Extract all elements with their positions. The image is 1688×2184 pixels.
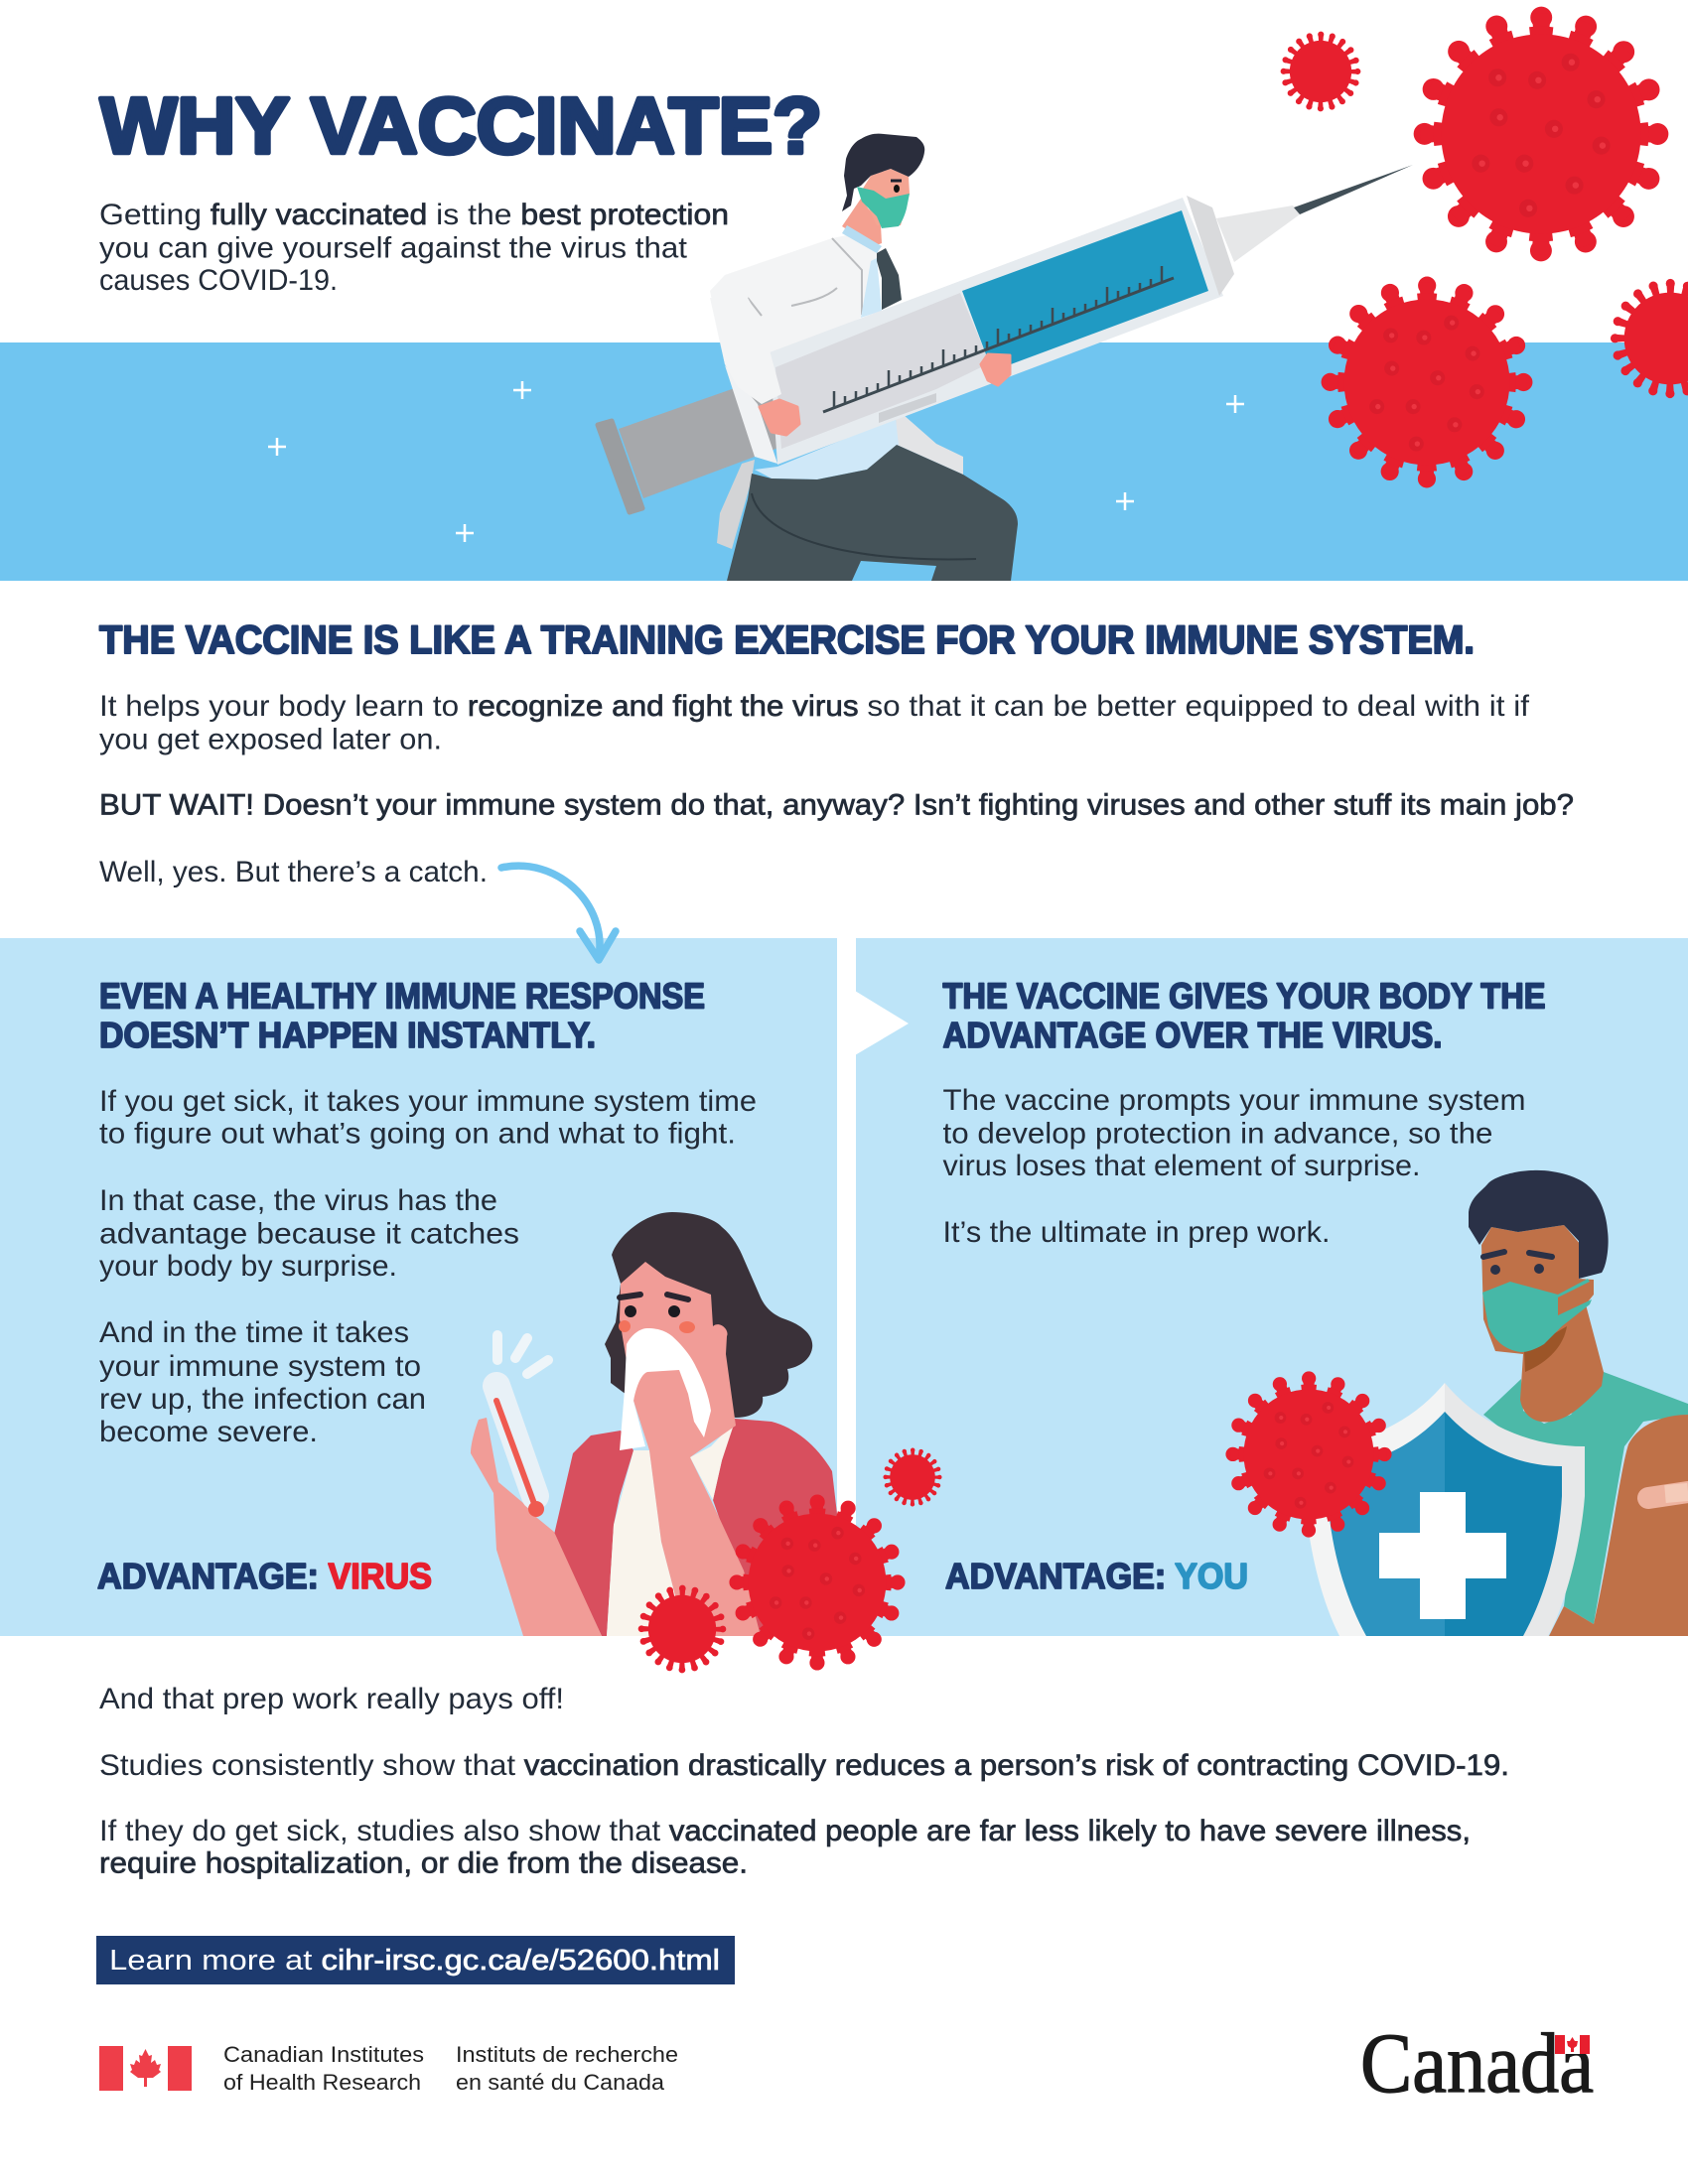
raised arm [633,1370,761,1636]
illustration: sick woman [471,1212,837,1636]
syringe [598,165,1413,512]
shirt [607,1450,695,1636]
doctor shirt lower [755,419,899,479]
virus by shield [1233,1379,1384,1530]
surgical mask [857,187,910,228]
Canada wordmark: Canada [1360,2015,1594,2111]
left panel text: advantage because it catches [99,1217,519,1251]
virus cluster top right [1284,18,1688,478]
shield inner [1328,1412,1562,1636]
right panel text: The vaccine prompts your immune system [943,1084,1525,1117]
left panel text: rev up, the infection can [99,1383,426,1416]
plunger cap [598,421,642,512]
tissue [620,1328,711,1450]
wordmark flag [1555,2035,1590,2054]
left panel heading: EVEN A HEALTHY IMMUNE RESPONSE [99,975,705,1017]
face and neck [620,1262,736,1457]
panel: vaccine advantage [856,938,1688,1636]
advantage you label: ADVANTAGE: YOU [945,1556,1248,1596]
explanation text: Well, yes. But there’s a catch. [99,856,488,888]
lower torso skin [1549,1606,1594,1636]
virus mid [1331,286,1523,478]
face [861,169,910,225]
right panel heading: THE VACCINE GIVES YOUR BODY THE [943,975,1545,1017]
shield outer [1305,1383,1585,1636]
coat fold lines [748,238,862,316]
virus large [737,1502,898,1663]
neck shadow [1524,1326,1567,1372]
jacket left [554,1431,633,1636]
explanation text [99,690,1574,888]
left panel text: And in the time it takes [99,1316,409,1349]
eye and brow [891,181,902,193]
collar [842,225,882,253]
closing text: And that prep work really pays off! [99,1683,564,1715]
left panel text: to figure out what’s going on and what to fight. [99,1118,736,1150]
curved arrow [501,866,616,960]
left panel text: become severe. [99,1416,318,1448]
sparkles on banner [268,381,1244,542]
intro text: you can give yourself against the virus that [99,232,688,264]
cheeks [619,1320,695,1333]
section heading: THE VACCINE IS LIKE A TRAINING EXERCISE FOR YOUR IMMUNE SYSTEM. [99,618,1475,662]
t-shirt [1483,1372,1688,1624]
eyes [1490,1264,1544,1275]
other arm [471,1418,602,1636]
hair [605,1212,812,1418]
virus right edge [1615,283,1688,394]
blue banner band [0,342,1688,581]
barrel [770,198,1223,465]
CIHR name: Instituts de recherche [456,2042,678,2067]
barrel left flange [725,365,777,464]
hand on plunger side [760,400,799,435]
doctor coat [710,235,879,364]
coat sleeve [710,298,781,404]
virus small [1284,35,1357,108]
CIHR name: of Health Research [223,2070,421,2095]
left panel text: your body by surprise. [99,1250,397,1283]
doctor coat tails [717,415,963,549]
syringe liquid [962,210,1208,364]
explanation text: BUT WAIT! Doesn’t your immune system do that, anyway? Isn’t fighting viruses and other stuff its main job? [99,788,1574,822]
intro text [99,199,729,297]
plunger rod [619,377,794,498]
advantage virus label: ADVANTAGE: VIRUS [97,1556,432,1596]
shirt upper [690,1422,735,1500]
right panel heading: ADVANTAGE OVER THE VIRUS. [943,1015,1442,1055]
CIHR name: Canadian Institutes [223,2042,424,2067]
neck [842,199,882,246]
illustration: vaccinated man with shield [1233,1170,1688,1636]
learn more button [96,1936,735,1984]
CIHR flag logo [99,2046,192,2091]
jacket right [713,1419,837,1636]
doctor trousers [727,445,1018,581]
thermometer alert rays [497,1335,548,1374]
left panel heading: DOESN’T HAPPEN INSTANTLY. [99,1015,596,1055]
CIHR name [223,2042,678,2095]
virus cluster bottom of left panel [641,1450,939,1670]
face and neck [1481,1225,1604,1423]
right panel text: virus loses that element of surprise. [943,1150,1420,1182]
closing text: Studies consistently show that vaccination drastically reduces a person’s risk of contracting COVID-19. [99,1749,1509,1782]
white pointer triangle [855,991,909,1055]
left panel text: your immune system to [99,1350,421,1383]
left panel heading [99,975,705,1055]
bandage [1648,1492,1688,1498]
CIHR name: en santé du Canada [456,2070,665,2095]
intro text: causes COVID-19. [99,264,338,297]
left panel text: If you get sick, it takes your immune system time [99,1085,757,1118]
hand on barrel [981,354,1010,385]
virus small lower [641,1588,723,1670]
trouser crease [752,493,976,559]
graduated scale [823,266,1174,412]
eyebrows [620,1295,688,1299]
arm [1586,1415,1688,1636]
right panel text [943,1084,1525,1249]
barrel interior grey [775,293,986,449]
eyebrows [1483,1252,1552,1257]
needle [1294,165,1413,214]
panel: immune response [0,938,837,1636]
closing text: require hospitalization, or die from the disease. [99,1846,748,1880]
illustration: doctor with giant syringe [598,134,1413,581]
closing text [99,1683,1509,1880]
left panel text: In that case, the virus has the [99,1184,497,1217]
hair [842,134,924,211]
explanation text: It helps your body learn to recognize and fight the virus so that it can be better equipped to deal with it if [99,690,1530,723]
virus small upper [886,1450,939,1504]
hair [1469,1170,1609,1279]
eyes [625,1305,680,1317]
explanation text: you get exposed later on. [99,723,442,756]
medical cross [1379,1492,1506,1619]
right panel text: It’s the ultimate in prep work. [943,1216,1331,1249]
intro text: Getting fully vaccinated is the best protection [99,199,729,231]
tie [877,248,902,310]
title: WHY VACCINATE? [100,81,822,170]
left panel text [99,1085,757,1448]
learn more button: Learn more at cihr-irsc.gc.ca/e/52600.html [109,1945,720,1977]
mask [1482,1279,1592,1352]
barrel band under hand [879,393,936,423]
right panel heading [943,975,1545,1055]
barrel flange [1187,196,1234,296]
closing text: If they do get sick, studies also show that vaccinated people are far less likely to have severe illness, [99,1815,1471,1847]
thermometer [496,1386,544,1517]
shirt front [861,258,882,318]
virus large [1425,18,1657,250]
right panel text: to develop protection in advance, so the [943,1118,1493,1150]
needle hub [1216,205,1300,262]
